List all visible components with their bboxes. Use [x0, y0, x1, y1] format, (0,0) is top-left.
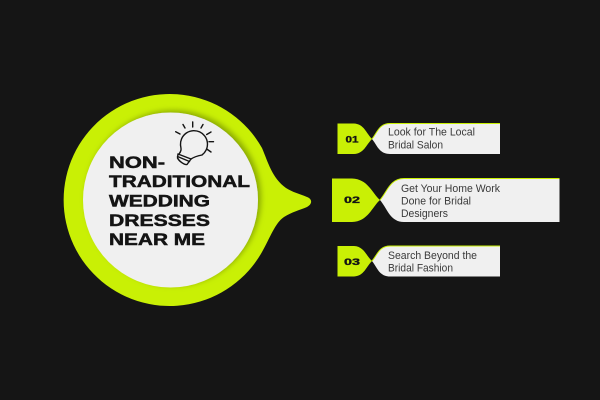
item 03: [338, 246, 500, 276]
text 02 line 3: Designers: [401, 208, 448, 220]
text 01 line 2: Bridal Salon: [388, 139, 443, 151]
heading: NON-: [109, 154, 165, 172]
text 02: Get Your Home Work: [401, 183, 500, 195]
icon: light bulb: [176, 122, 214, 165]
bubble ring with tail: [64, 94, 311, 306]
text panel 01: [372, 124, 500, 154]
speech bubble: [64, 94, 311, 306]
text 02 line 2: Done for Bridal: [401, 196, 471, 208]
number 01: 01: [346, 134, 359, 146]
heading: [109, 154, 250, 249]
number tab 02: [332, 178, 380, 222]
item 01: [338, 124, 500, 154]
heading: NEAR ME: [109, 231, 205, 249]
number tab 01: [338, 124, 372, 154]
panel 03 top edge: [372, 246, 500, 261]
panel 01 top edge: [372, 124, 500, 139]
text 03 line 2: Bridal Fashion: [388, 262, 453, 274]
item 02: [332, 178, 560, 222]
heading: WEDDING: [109, 192, 210, 210]
text 03: Search Beyond the: [388, 250, 477, 262]
heading: TRADITIONAL: [109, 173, 250, 191]
number 02: 02: [344, 195, 360, 206]
heading: DRESSES: [109, 212, 210, 230]
text 01: Look for The Local: [388, 126, 475, 138]
panel 02 top edge: [380, 178, 560, 200]
text panel 03: [372, 246, 500, 276]
text panel 02: [380, 178, 560, 222]
number tab 03: [338, 246, 372, 276]
number 03: 03: [344, 257, 360, 268]
bubble inner circle: [83, 112, 258, 288]
